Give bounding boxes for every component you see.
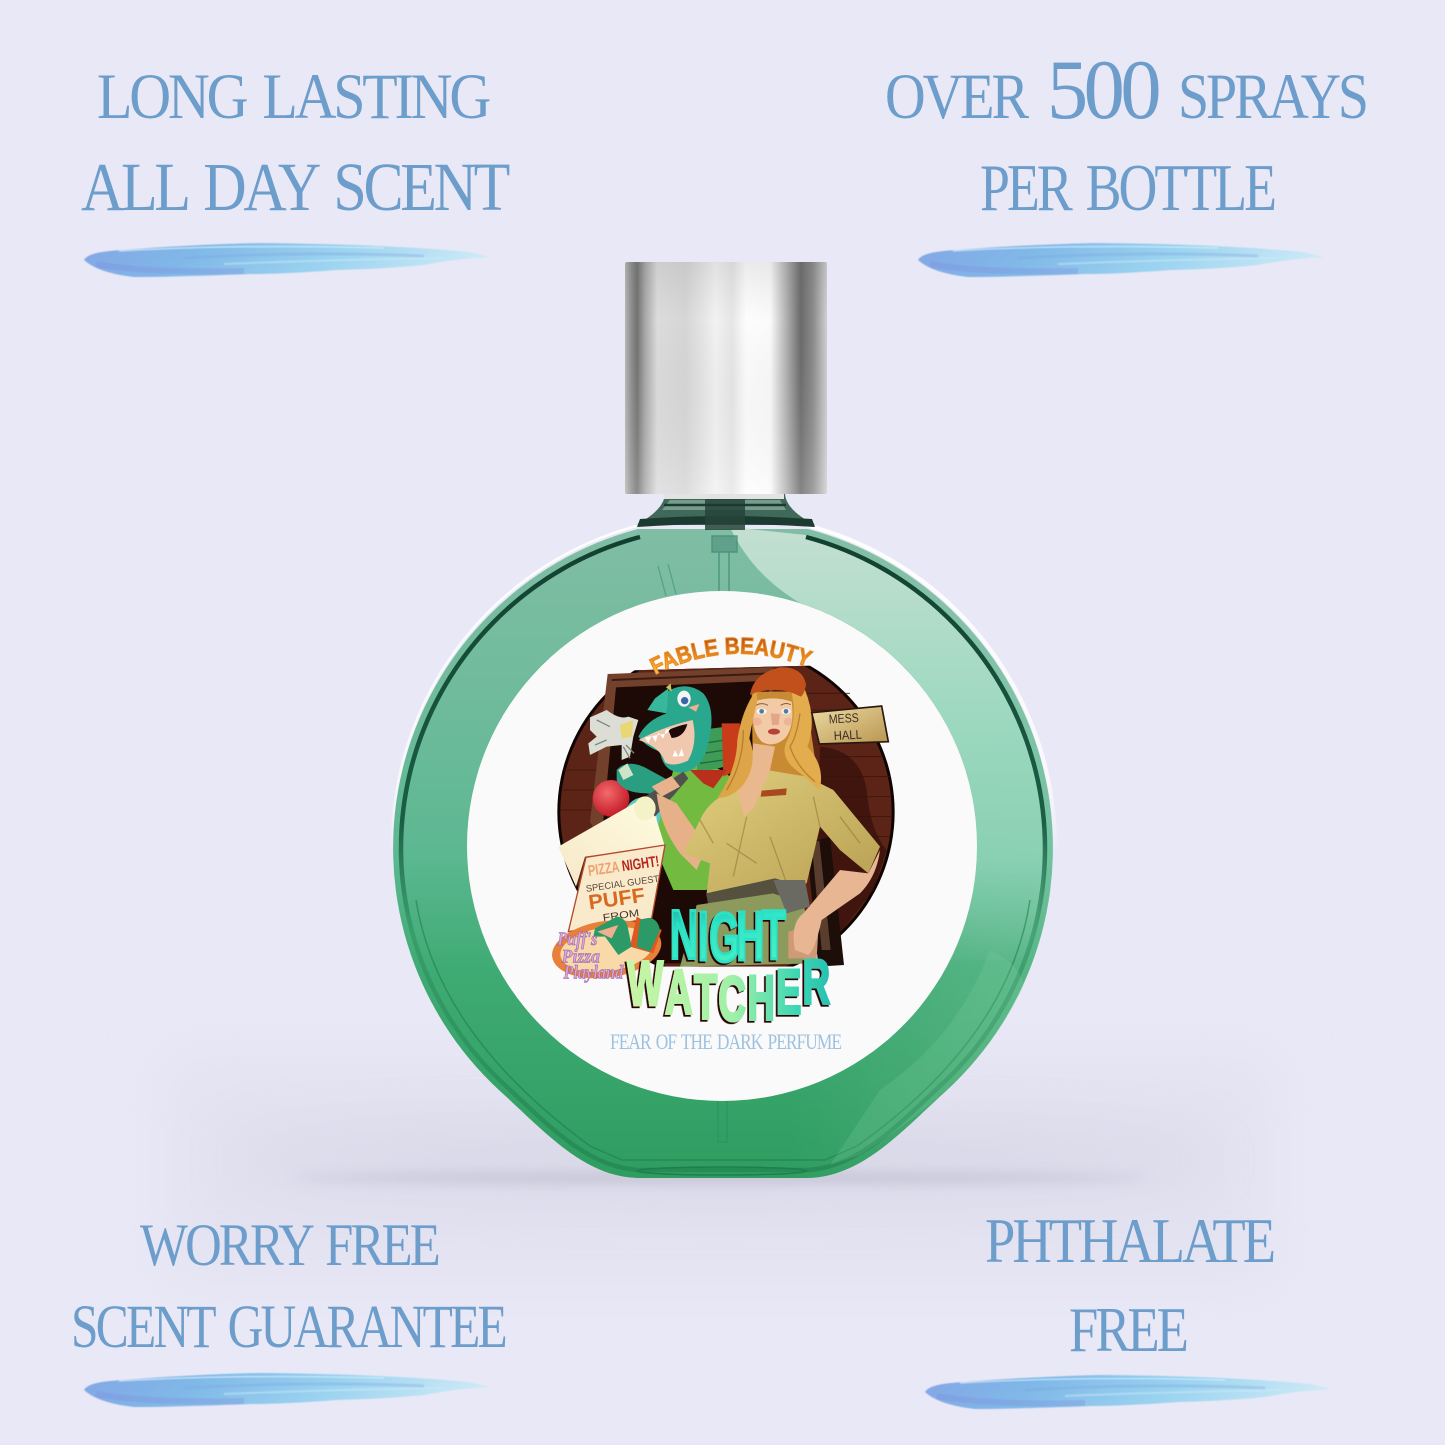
poster: pizza night: PIZZA NIGHT! — [587, 853, 660, 880]
neckline — [737, 743, 775, 817]
hat — [750, 667, 806, 697]
silver collar — [664, 494, 784, 499]
leg — [788, 929, 818, 958]
sign: mess hall — [812, 706, 888, 744]
brush stroke — [84, 243, 490, 277]
dark glass edge — [401, 537, 1045, 1170]
subtitle: fear of the dark perfume: FEAR OF THE DARK PERFUME — [610, 1029, 842, 1054]
label artwork — [552, 637, 895, 1035]
brush stroke — [84, 1373, 490, 1407]
text block: long lasting — [81, 61, 509, 277]
logo: puff's pizza playland: Puff's — [556, 929, 597, 950]
chest badge — [761, 788, 787, 797]
poster: pizza night — [568, 845, 667, 932]
mascot body — [653, 765, 734, 890]
heading: per bottle: PER BOTTLE — [980, 151, 1275, 225]
text block: over 500 sprays — [885, 43, 1366, 277]
heading: free: FREE — [1069, 1294, 1186, 1365]
skirt — [680, 893, 817, 967]
mascot dinosaur — [617, 683, 740, 890]
heading: over 500 sprays: OVER — [885, 61, 1030, 133]
hair left lock — [717, 689, 757, 798]
bottle neck — [636, 494, 815, 525]
bottle body — [393, 529, 1053, 1178]
wood backdrop — [557, 666, 895, 967]
mascot arm — [617, 764, 680, 797]
cap — [625, 262, 827, 494]
facial features — [751, 703, 793, 735]
floor shadow — [170, 1060, 1270, 1280]
flashlight — [634, 772, 688, 820]
heading: worry free: WORRY FREE — [140, 1212, 439, 1278]
heading: over 500 sprays: SPRAYS — [1178, 61, 1366, 133]
outer white rim — [392, 525, 640, 848]
arm on hip — [794, 850, 880, 955]
poster: pizza night: FROM — [602, 908, 640, 924]
mascot eye — [677, 691, 691, 707]
inner glass line — [416, 900, 1030, 1160]
text block: worry free — [71, 1212, 506, 1407]
heading: long lasting: LONG LASTING — [97, 61, 489, 133]
mascot head — [638, 686, 712, 773]
hair strands — [727, 713, 815, 790]
heading: scent guarantee: SCENT GUARANTEE — [71, 1294, 506, 1361]
heading: all day scent: ALL DAY SCENT — [81, 149, 509, 225]
glass highlight wedge — [730, 527, 1046, 960]
title: night: NIGHT — [670, 895, 786, 976]
balloons — [593, 780, 663, 843]
lower light reflection — [830, 950, 1024, 1165]
brand name: fable beauty: FABLE BEAUTY — [648, 637, 814, 675]
woman — [657, 667, 880, 967]
brush stroke — [925, 1375, 1331, 1409]
logo: puff's pizza playland: Pizza — [561, 947, 600, 968]
heading: over 500 sprays — [885, 43, 1366, 137]
logo: puff's pizza playland — [548, 914, 665, 985]
base thickness — [637, 1167, 807, 1175]
sign: mess hall: MESS — [828, 711, 859, 726]
bottle — [392, 262, 1055, 1178]
body side light — [393, 529, 1053, 1178]
door frame — [590, 667, 844, 967]
belt — [706, 878, 807, 905]
face — [753, 698, 792, 744]
heading: phthalate: PHTHALATE — [985, 1205, 1273, 1276]
neck shading — [637, 498, 815, 530]
forearm holding flashlight — [657, 793, 707, 870]
label disc — [467, 591, 977, 1101]
shirt folds — [700, 797, 860, 883]
mascot mouth — [639, 720, 695, 764]
sign: mess hall: HALL — [833, 728, 862, 743]
shirt — [683, 770, 880, 893]
logo: puff's pizza playland: Playland — [562, 962, 624, 983]
hair back — [752, 692, 817, 797]
poster: pizza night: PUFF — [587, 884, 646, 915]
heading: over 500 sprays: 500 — [1047, 43, 1159, 137]
poster: pizza night: SPECIAL GUEST — [585, 874, 660, 894]
robot toy — [588, 710, 638, 780]
text block: phthalate free — [925, 1205, 1331, 1409]
woman shadow on wall — [817, 747, 887, 933]
dip tube — [658, 536, 737, 1142]
brush stroke — [918, 243, 1324, 277]
title: watcher: WATCHER — [627, 948, 830, 1035]
flashlight beam — [558, 800, 665, 887]
holster — [773, 880, 810, 913]
hair right lock — [785, 690, 821, 791]
